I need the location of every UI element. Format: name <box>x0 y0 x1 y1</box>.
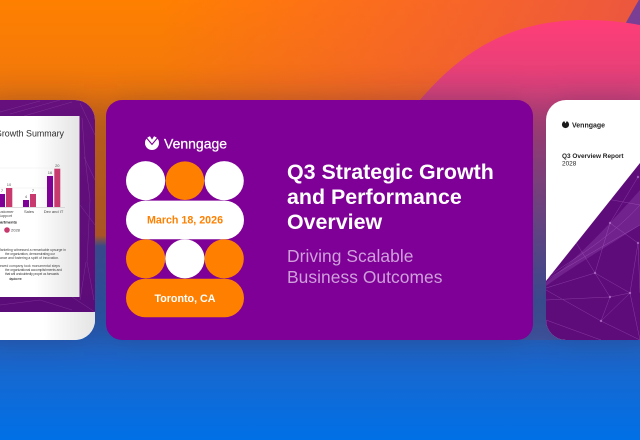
report paragraph <box>0 248 66 281</box>
report paragraph: the organization, demonstrating our <box>5 252 56 256</box>
left report card <box>0 100 95 340</box>
subtitle: Business Outcomes <box>287 267 443 287</box>
report paragraph: ance and fostering a spirit of innovation. <box>0 256 59 260</box>
network pattern <box>0 100 95 312</box>
location pill <box>126 279 244 317</box>
report paragraph: that will undoubtedly propel us forwards <box>5 272 59 276</box>
purple cover area <box>0 100 95 312</box>
title: Overview <box>287 210 382 234</box>
pink blob <box>400 20 640 340</box>
bar chart: 16 <box>48 170 53 175</box>
subtitle <box>287 246 443 287</box>
card shadows <box>0 100 640 340</box>
report paragraph: ewed company took monumental steps <box>0 264 60 268</box>
chart legend: 2028 <box>11 228 21 232</box>
cover title: Q3 Overview Report <box>562 153 624 160</box>
row 1 circles <box>126 161 244 200</box>
location pill: Toronto, CA <box>155 293 216 305</box>
purple diagonal cover <box>546 163 640 340</box>
report paragraph: the organizational accomplishments and <box>5 268 62 272</box>
main purple card <box>106 100 533 340</box>
small logo wordmark: Venngage <box>572 122 605 129</box>
network pattern <box>546 176 640 340</box>
icon: Venngage logo <box>145 136 159 150</box>
bar chart: 20 <box>55 163 60 168</box>
bar chart: 7 <box>32 188 35 193</box>
right report card <box>546 100 640 340</box>
bar chart: 4 <box>25 194 28 199</box>
date pill <box>126 201 244 239</box>
bar chart: Sales <box>24 209 34 214</box>
subtitle: Driving Scalable <box>287 246 413 266</box>
bar chart: Dev and IT <box>44 209 64 214</box>
report paragraph: Marketing witnessed a remarkable upsurge in <box>0 248 66 252</box>
white footer band <box>59 312 95 340</box>
bar chart <box>0 163 65 218</box>
circle and pill grid <box>126 161 244 317</box>
white report page <box>0 116 80 297</box>
cover title: 2028 <box>562 160 577 168</box>
purple corner shape <box>624 0 640 30</box>
cover title <box>562 153 624 168</box>
title <box>287 160 494 234</box>
icon: small Venngage logo <box>562 121 569 128</box>
date pill: March 18, 2026 <box>147 214 223 226</box>
bar chart: 10 <box>7 182 12 187</box>
title: and Performance <box>287 185 462 209</box>
row 3 circles <box>126 239 244 278</box>
chart legend <box>0 220 21 233</box>
report paragraph: days to come. <box>9 277 22 281</box>
title: Q3 Strategic Growth <box>287 160 494 184</box>
logo wordmark: Venngage <box>164 136 227 152</box>
bar chart: 7 <box>1 188 4 193</box>
